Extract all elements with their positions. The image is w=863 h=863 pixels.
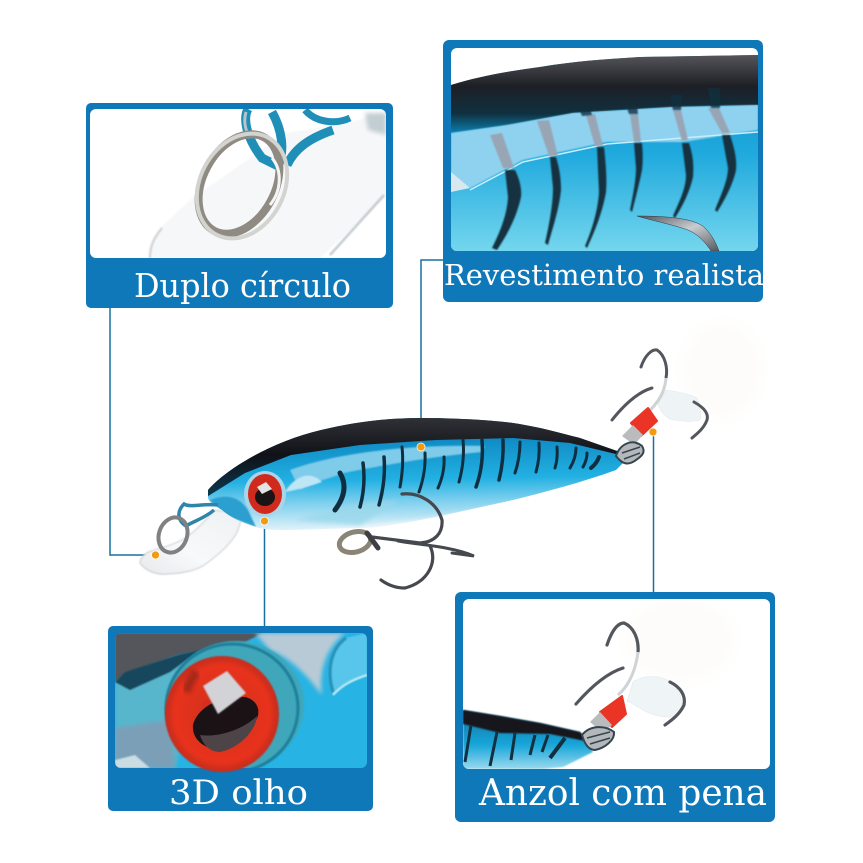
diving lip [140,510,243,574]
callout dot: eye [260,517,268,525]
nose eyelet and split ring [154,504,218,557]
callout dot: feather hook [649,428,657,436]
panel: Duplo círculo [86,103,393,308]
lure eye [244,471,286,517]
leader line: Anzol com pena [652,432,654,592]
feather haze [682,322,762,418]
infographic canvas [86,40,775,822]
panel: Revestimento realista [443,40,764,302]
photo: realistic coating close-up [451,48,758,251]
eye iris and pupil [165,656,279,772]
tail feather hook [612,350,707,463]
photo: split ring close-up [90,109,386,258]
label: 3D olho [169,773,308,813]
leader line: 3D olho [264,521,266,626]
label: Anzol com pena [478,773,767,814]
callout dot: ring [152,551,160,559]
label: Revestimento realista [444,258,764,292]
leader line: Revestimento realista [421,260,443,447]
panel: 3D olho [108,626,373,813]
belly treble hook [337,494,474,588]
photo: feather hook close-up [463,598,770,769]
stripes [335,440,599,510]
panel: Anzol com pena [455,592,775,822]
label: Duplo círculo [134,266,351,305]
lure body [208,418,623,530]
main fishing lure [140,322,762,588]
photo: 3D eye close-up [115,633,367,772]
leader line: Duplo círculo [110,308,155,555]
callout dot: coating [417,443,425,451]
